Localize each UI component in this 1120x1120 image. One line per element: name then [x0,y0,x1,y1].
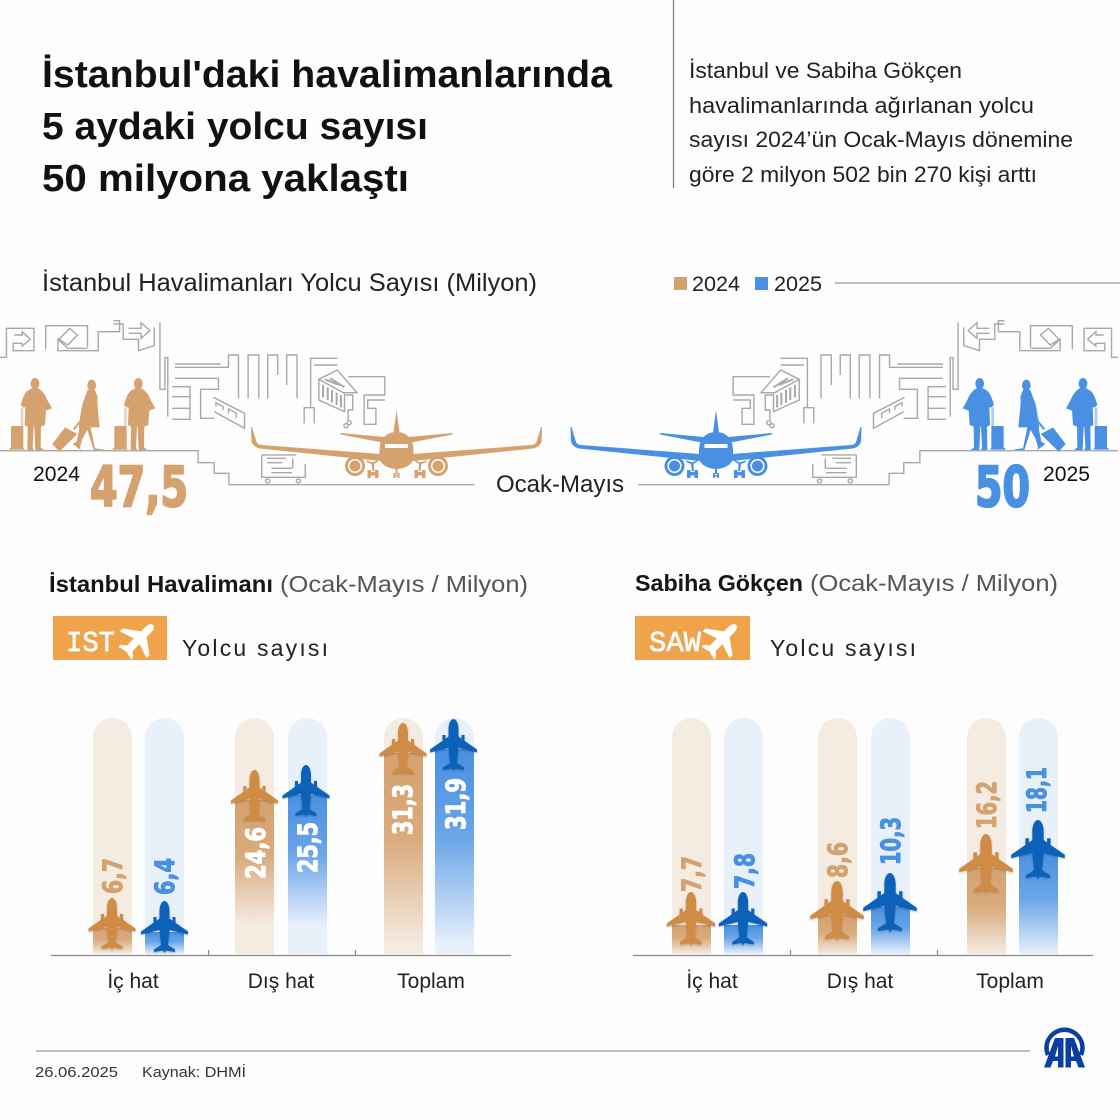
bar chart [88,718,477,954]
chart heading: İstanbul Havalimanları Yolcu Sayısı (Milyon) [42,268,537,297]
plane markers [88,719,477,953]
title [42,54,613,200]
summary text block: İstanbul ve Sabiha Gökçen [689,58,962,83]
legend [674,273,1120,296]
total 2025: 2025 [1043,463,1090,486]
panel heading: (Ocak-Mayıs / Milyon) [280,571,528,597]
total 2024 [33,455,188,519]
values [98,778,472,895]
total 2025 [975,455,1090,519]
axis [51,950,511,956]
summary text block [674,0,1073,188]
panel: Sabiha Gokcen [633,570,1093,993]
SAW badge [635,612,750,667]
airplane 2025 [570,410,862,478]
subtitle: Yolcu sayısı [770,635,916,661]
SAW badge: SAW [649,627,702,660]
IST badge: IST [66,627,115,660]
values: 8,6 [823,842,854,878]
subtitle: Yolcu sayısı [182,635,328,661]
values: 25,5 [293,822,324,873]
panel heading: Sabiha Gökçen [635,570,803,596]
airplane 2024 [251,410,542,478]
values: 16,2 [972,781,1003,829]
footer: Kaynak: DHMİ [142,1063,246,1081]
passengers 2025 [963,378,1109,452]
values: 6,4 [150,858,181,895]
total 2024: 47,5 [90,455,188,519]
category labels: Toplam [976,970,1044,993]
total 2024: 2024 [33,463,80,486]
period label: Ocak-Mayıs [496,471,624,498]
values: 31,9 [441,778,472,830]
category labels: İç hat [686,970,738,993]
values: 10,3 [876,817,907,865]
title: 5 aydaki yolcu sayısı [42,106,428,148]
axis [633,950,1093,956]
values: 7,8 [730,853,761,889]
passengers 2024 [9,378,155,452]
category labels: Dış hat [248,970,314,993]
illustration: terminal line art left [0,321,475,485]
values [677,767,1053,892]
category labels: Dış hat [827,970,893,993]
panel heading: İstanbul Havalimanı [49,571,273,597]
category labels [686,970,1044,993]
panel heading [635,570,1058,596]
values: 31,3 [388,784,419,835]
summary text block: göre 2 milyon 502 bin 270 kişi arttı [689,162,1037,187]
IST badge [53,612,167,667]
values: 7,7 [677,856,708,892]
title: 50 milyona yaklaştı [42,158,409,200]
footer [35,1051,1030,1081]
plane markers [667,820,1065,946]
logo: AA [1044,1030,1085,1068]
legend: 2024 [692,273,740,296]
values: 18,1 [1022,767,1053,813]
title: İstanbul'daki havalimanlarında [42,54,613,96]
bar chart [667,718,1065,954]
summary text block: sayısı 2024’ün Ocak-Mayıs dönemine [689,127,1073,152]
total 2025: 50 [975,455,1030,519]
category labels: İç hat [107,970,159,993]
values: 6,7 [98,858,129,894]
category labels: Toplam [397,970,465,993]
panel: Istanbul Airport [49,571,528,993]
panel heading: (Ocak-Mayıs / Milyon) [810,570,1058,596]
legend: 2025 [774,273,822,296]
illustration: terminal line art right [638,321,1118,485]
footer: 26.06.2025 [35,1064,118,1081]
values: 24,6 [241,827,272,879]
summary text block: havalimanlarında ağırlanan yolcu [689,93,1034,118]
category labels [107,970,465,993]
panel heading [49,571,528,597]
